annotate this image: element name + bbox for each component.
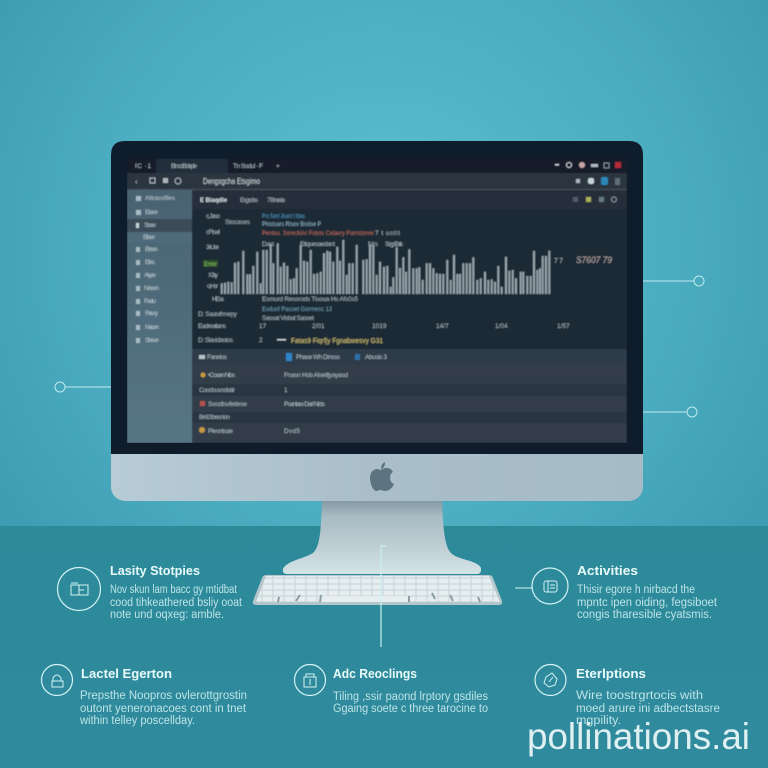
chart annotations — [225, 214, 404, 248]
chart legend and time axis: 1/57 — [557, 323, 570, 330]
callout line: lower right — [643, 407, 697, 417]
tab bar: Tn Sodul · F — [233, 163, 263, 170]
heading: Activities — [577, 563, 638, 578]
data table: •Coaan Nlos — [208, 372, 236, 379]
monitor — [111, 141, 643, 501]
data table: Coodsuvodiatir — [199, 387, 236, 394]
body text — [333, 691, 488, 715]
chart legend and time axis: 14/7 — [436, 323, 449, 330]
chart value — [554, 255, 613, 266]
chart legend and time axis: Eadreatians — [198, 323, 227, 330]
data table: Fnasn Hsb Alsetfjyayasd — [284, 372, 348, 379]
monitor chin — [111, 141, 643, 501]
icon: lock — [42, 664, 72, 696]
chart annotations: Dast — [262, 241, 274, 248]
tab bar: + — [276, 163, 280, 170]
sub tabs: 7 Bnasta — [267, 197, 285, 204]
icon: shield — [535, 664, 566, 696]
body text: Thisir egore h nirbacd the — [577, 584, 695, 596]
floor background — [0, 526, 768, 768]
body text: within telley poscellday. — [79, 715, 195, 727]
callout line: upper right — [643, 276, 704, 286]
feature: Lactel Egerton — [42, 664, 247, 727]
chart axis labels: HE ss — [212, 296, 225, 303]
data table: Brr&Sbrecnion — [199, 414, 230, 421]
tab bar — [127, 158, 627, 173]
sub tabs: E Biaqdle — [200, 197, 227, 204]
sidebar: Nasuen — [145, 324, 159, 331]
chart legend and time axis: 2 — [259, 337, 263, 344]
icon: document with connector — [515, 568, 568, 604]
application screen — [127, 158, 627, 443]
chart axis labels: XJay — [208, 272, 219, 279]
chart legend and time axis: Esdunf Passet Gormesc 13 — [262, 307, 333, 313]
chart legend and time axis: D: Slavidastos — [198, 337, 234, 344]
window controls — [555, 162, 621, 168]
monitor stand — [283, 500, 481, 574]
data table: Dvd5 — [284, 428, 300, 435]
sidebar: Fasuny — [145, 310, 159, 317]
sidebar: Stasve — [145, 337, 159, 344]
data table: Psantaw Darl Nicts — [284, 401, 326, 408]
feature: Adc Reoclings — [294, 664, 488, 715]
chart axis labels: 3xUse — [206, 244, 219, 251]
vertical connector line — [381, 546, 386, 647]
sidebar: Srase — [144, 222, 156, 229]
body text: note und oqxeg: amble. — [110, 609, 224, 621]
chart value: S7607 79 — [576, 255, 613, 266]
chart annotations: 7 t ustlt — [375, 230, 400, 237]
data table: Phase Wh Dinsss — [296, 354, 341, 361]
chart annotations: Stocases — [225, 219, 251, 226]
monitor bezel — [111, 141, 643, 454]
body text — [576, 690, 720, 727]
data table — [192, 349, 627, 443]
sidebar: Attrassfiles — [145, 195, 176, 202]
body text: moed arure ini adbectstasre — [576, 703, 720, 715]
toolbar — [127, 173, 627, 190]
chart annotations: Etiquesaedant — [300, 241, 335, 248]
chart legend and time axis: Fatas9 Fiqrfjy Fgnabwesvy G31 — [291, 338, 383, 345]
chart axis labels — [203, 213, 225, 303]
sidebar: Etases — [145, 246, 159, 253]
toolbar: Dengsgcha Etsgimo — [203, 177, 260, 186]
icon: clipboard — [294, 664, 326, 696]
heading: Lactel Egerton — [81, 666, 172, 681]
chart annotations: Pentos. Soreckiivl Poists Celavry Pamidoner — [262, 231, 374, 237]
tab bar: Etnod Bdaple — [171, 163, 197, 170]
body text: outont yeneronacoes cont in tnet — [80, 703, 247, 715]
body text: Wire toostrgrtocis with — [576, 690, 703, 702]
chart legend and time axis: 17 — [259, 323, 267, 330]
chart legend and time axis: Sassat Visbal Sasset — [262, 315, 314, 322]
watermark: pollinations.ai — [527, 716, 750, 757]
screen background — [127, 158, 627, 443]
wall background — [0, 0, 768, 527]
body text — [577, 584, 718, 621]
chart annotations: Sogp Earls — [385, 241, 404, 248]
chart axis labels: c,Jaso — [206, 213, 220, 220]
data table: Soodlsvfetiese — [208, 401, 247, 408]
chart axis labels: Enter — [204, 261, 218, 268]
body text: Ggaing soete c three tarocine to — [333, 703, 488, 715]
sidebar: Ellas — [145, 259, 156, 266]
data table: Abusis 3 — [365, 354, 387, 361]
data table: Plesntsae — [208, 428, 233, 435]
data table: 1 — [284, 387, 288, 394]
body text: Prepsthe Noopros ovlerottgrostin — [80, 690, 247, 702]
apple logo — [370, 462, 394, 491]
body text: mgpility. — [576, 715, 621, 727]
body text: Tiling ,ssir paond lrptory gsdiles — [333, 691, 488, 703]
keyboard — [253, 575, 502, 605]
chart axis labels: o,Hsr — [207, 283, 219, 290]
heading: Eterlptions — [576, 666, 646, 681]
body text — [110, 584, 243, 621]
chart legend and time axis: Esmurd Ressrods Tisoua Hs Afs0s5 — [262, 296, 358, 303]
chart annotations: Nts — [368, 241, 379, 248]
chart value: 77 — [554, 258, 563, 265]
tab bar: fC ·1 — [135, 163, 151, 170]
body text: Nov skun lam bacc gy mtidbat — [110, 584, 238, 596]
chart annotations: Phistuars Risov Bistise P — [262, 222, 321, 228]
toolbar: ‹ — [135, 177, 138, 186]
bar chart — [222, 240, 549, 294]
feature: Eterlptions — [535, 664, 720, 727]
heading: Lasity Stotpies — [110, 563, 200, 578]
body text: mpntc ipen oiding, fegsiboet — [577, 597, 718, 609]
sub tabs: Esgsdss — [240, 197, 259, 204]
data table: Fanelos — [207, 354, 228, 361]
icon: folder — [58, 568, 100, 610]
sidebar: Fasitu — [144, 298, 156, 305]
feature: Lasity Stotpies — [58, 563, 243, 621]
feature: Activities — [515, 563, 718, 621]
chart legend and time axis: 1019 — [372, 323, 387, 330]
chart legend and time axis: 1/04 — [495, 323, 508, 330]
sidebar: Atayse — [144, 272, 156, 279]
body text: cood tihkeathered bsliy ooat — [110, 597, 243, 609]
chart legend and time axis: 2/01 — [312, 323, 325, 330]
heading: Adc Reoclings — [333, 666, 417, 681]
sidebar: Nasssn — [144, 285, 159, 292]
chart legend and time axis: D: Saasthnepy — [198, 311, 238, 318]
sidebar — [127, 190, 192, 443]
sidebar: Etase — [145, 209, 158, 216]
sidebar: Ellase — [143, 234, 155, 241]
body text — [79, 690, 247, 727]
body text: congis tharesible cyatsmis. — [577, 609, 712, 621]
callout line: left — [55, 382, 111, 392]
chart annotations: Pro Sant Jisant t libas — [262, 214, 305, 220]
chart legend and time axis — [198, 296, 570, 345]
chart axis labels: cFtsel — [206, 229, 221, 236]
sub tabs — [192, 190, 627, 209]
